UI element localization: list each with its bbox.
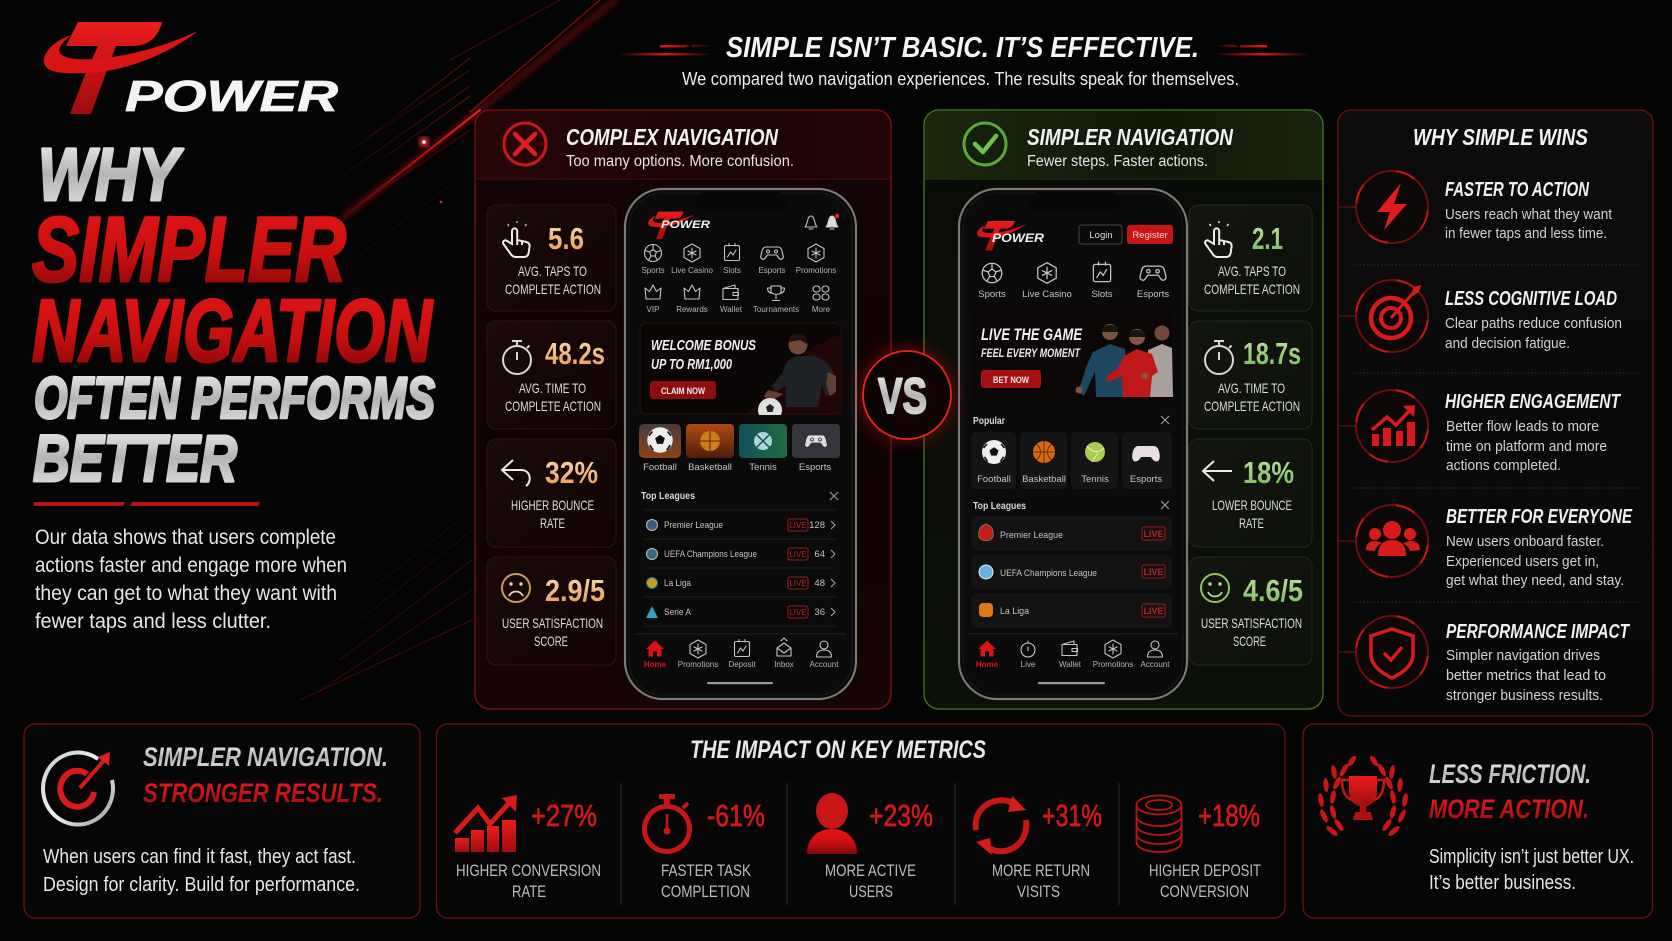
subheading: Fewer steps. Faster actions. [1027, 153, 1208, 170]
promo banner: UP TO RM1,000 [651, 357, 732, 373]
bottom nav: Account [810, 660, 839, 669]
sport tiles: Basketball [688, 462, 732, 473]
heading: LESS FRICTION. [1429, 759, 1591, 789]
player: red kit [1106, 329, 1158, 397]
category grid: Live Casino [671, 266, 713, 275]
app logo: POWER [992, 231, 1044, 245]
popular tiles [971, 415, 1172, 489]
promo banner: CLAIM NOW [661, 386, 705, 396]
stat card: time: 18.7s [1243, 336, 1301, 371]
reason: less cognitive load [1356, 280, 1622, 352]
metric: task completion: -61% [707, 798, 765, 833]
category row [978, 262, 1169, 300]
stat card: satisfaction: USER SATISFACTION [502, 615, 603, 631]
panel: stronger results [24, 724, 420, 918]
stat card: satisfaction: SCORE [1233, 633, 1266, 649]
heading accent: STRONGER RESULTS. [143, 778, 383, 808]
reason: higher engagement [1356, 390, 1621, 474]
league list: 64 [814, 549, 825, 560]
sport tiles [639, 424, 840, 473]
stat card: bounce: 32% [545, 455, 598, 490]
reason: better for everyone [1356, 505, 1632, 589]
bottom nav: Live [1021, 660, 1036, 669]
bottom nav [635, 634, 846, 684]
main title: BETTER [33, 421, 237, 495]
bottom nav: Home [976, 660, 999, 669]
reason: performance impact [1356, 616, 1630, 704]
intro paragraph: fewer taps and less clutter. [35, 610, 271, 633]
stat card: bounce: HIGHER BOUNCE [511, 497, 594, 513]
stat card: time: AVG. TIME TO [519, 380, 586, 396]
category grid: More [812, 305, 831, 314]
main title: SIMPLER [32, 199, 346, 301]
league list: LIVE [1143, 567, 1164, 577]
metric: task completion: COMPLETION [661, 882, 750, 901]
sport tiles: Football [643, 462, 677, 473]
category grid: Rewards [676, 305, 708, 314]
intro paragraph: Our data shows that users complete [35, 526, 336, 549]
stat card: satisfaction: USER SATISFACTION [1201, 615, 1302, 631]
stat card: taps [1189, 205, 1312, 311]
heading: simpler navigation: SIMPLER NAVIGATION [1027, 124, 1233, 150]
league list: LIVE [789, 608, 807, 617]
login button: Login [1089, 230, 1113, 241]
phone: complex app [625, 189, 856, 699]
promo banner: BET NOW [993, 375, 1029, 385]
league list: Serie A [664, 607, 692, 618]
metric: active users [807, 793, 933, 901]
body text [43, 846, 360, 896]
category row: Slots [1091, 289, 1113, 300]
stat card: time: AVG. TIME TO [1218, 380, 1285, 396]
stat card: time [487, 321, 616, 429]
popular tiles: Esports [1130, 474, 1162, 485]
stat card: taps: AVG. TAPS TO [518, 263, 587, 279]
panel: impact on key metrics [436, 724, 1285, 918]
league list: 48 [814, 578, 825, 589]
login button [1079, 225, 1122, 244]
bottom nav: Inbox [774, 660, 794, 669]
reason: less cognitive load: LESS COGNITIVE LOAD [1445, 288, 1617, 310]
reason: higher engagement: Better flow leads to more [1446, 419, 1599, 435]
player: white kit [1148, 326, 1173, 397]
popular tiles: Popular [973, 415, 1005, 427]
league list [641, 490, 838, 626]
stat card: satisfaction: SCORE [534, 633, 568, 649]
metric: conversion [455, 795, 601, 901]
heading: why simple wins: WHY SIMPLE WINS [1413, 124, 1589, 150]
intro paragraph [35, 526, 347, 633]
metric: active users: +23% [869, 798, 933, 833]
metric: return visits [976, 796, 1102, 901]
metric: active users: USERS [849, 882, 893, 901]
bottom nav: Deposit [728, 660, 756, 669]
metric: conversion: HIGHER CONVERSION [456, 861, 601, 880]
heading accent: MORE ACTION. [1429, 794, 1589, 824]
panel: why simple wins [1338, 110, 1653, 716]
reason: better for everyone: get what they need, and stay. [1446, 573, 1624, 589]
stat card: bounce: LOWER BOUNCE [1212, 497, 1292, 513]
section header [619, 32, 1310, 89]
logo: T Power: POWER [125, 72, 338, 121]
reason: less cognitive load: Clear paths reduce confusion [1445, 316, 1622, 332]
stat card: time [1189, 321, 1312, 429]
popular tiles: Basketball [1022, 474, 1066, 485]
notification icons [805, 214, 839, 229]
heading: THE IMPACT ON KEY METRICS [690, 736, 986, 764]
metric: deposit conversion: HIGHER DEPOSIT [1149, 861, 1261, 880]
league list [971, 500, 1172, 628]
bottom nav: Promotions [678, 660, 718, 669]
panel: complex navigation [475, 110, 891, 709]
stat card: taps: 2.1 [1252, 221, 1283, 256]
stat card: taps: 5.6 [548, 221, 584, 256]
metric: deposit conversion: +18% [1198, 798, 1260, 833]
stat card: time: 48.2s [545, 336, 605, 371]
metric: task completion: FASTER TASK [661, 861, 752, 880]
reason: better for everyone: New users onboard faster. [1446, 534, 1604, 550]
body text: Design for clarity. Build for performance. [43, 874, 360, 896]
bottom nav: Account [1141, 660, 1170, 669]
stat card: time: COMPLETE ACTION [1204, 398, 1300, 414]
stat card: bounce: RATE [1239, 515, 1264, 531]
reason: faster to action [1356, 171, 1612, 243]
category row: Sports [978, 289, 1006, 300]
league list: Top Leagues [641, 490, 695, 502]
reason: faster to action: in fewer taps and less time. [1445, 226, 1607, 242]
stat card: bounce [487, 439, 616, 547]
metric: task completion [644, 794, 765, 901]
league list: LIVE [1143, 529, 1164, 539]
metric: return visits: +31% [1042, 798, 1102, 833]
reason: faster to action: Users reach what they want [1445, 207, 1612, 223]
bottom nav: Promotions [1093, 660, 1133, 669]
background red light streaks [300, 0, 615, 700]
register button: Register [1132, 230, 1168, 241]
panel: less friction [1303, 724, 1652, 918]
category row: Esports [1137, 289, 1169, 300]
sport tiles: Esports [799, 462, 831, 473]
promo banner [972, 310, 1173, 402]
icon: green check [964, 123, 1006, 165]
stat card: taps: COMPLETE ACTION [1204, 281, 1300, 297]
main title: WHY [38, 133, 184, 216]
stat card: bounce: 18% [1243, 455, 1294, 490]
logo: T Power [44, 22, 338, 121]
intro paragraph: they can get to what they want with [35, 582, 337, 605]
category grid: Promotions [796, 266, 836, 275]
promo banner: FEEL EVERY MOMENT [981, 346, 1081, 360]
icon: red cross [504, 123, 546, 165]
icon: trophy with laurel [1317, 755, 1409, 837]
league list: 128 [809, 520, 825, 531]
stat card: satisfaction [1189, 557, 1312, 665]
icon: silver target with arrow [43, 752, 113, 825]
bottom nav: Wallet [1059, 660, 1082, 669]
category grid: Esports [758, 266, 786, 275]
stat card: taps: COMPLETE ACTION [505, 281, 601, 297]
league list: Top Leagues [973, 500, 1026, 512]
category grid: Slots [723, 266, 741, 275]
heading: complex navigation: COMPLEX NAVIGATION [566, 124, 778, 150]
reason: faster to action: FASTER TO ACTION [1445, 179, 1589, 201]
reason: higher engagement: actions completed. [1446, 458, 1561, 474]
metric: conversion: RATE [512, 882, 546, 901]
section header: We compared two navigation experiences. The results speak for themselves. [682, 69, 1239, 89]
bottom nav: Home [644, 660, 667, 669]
body text: When users can find it fast, they act fast. [43, 846, 356, 868]
reason: higher engagement: time on platform and more [1446, 439, 1607, 455]
league list: LIVE [789, 579, 807, 588]
subheading: Too many options. More confusion. [566, 153, 794, 170]
main title: NAVIGATION [32, 281, 434, 380]
panel: simpler navigation [924, 110, 1323, 709]
promo banner: LIVE THE GAME [981, 326, 1083, 344]
reason: better for everyone: Experienced users get in, [1446, 554, 1599, 570]
stat card: bounce: RATE [540, 515, 565, 531]
league list: LIVE [1143, 606, 1164, 616]
VS badge [857, 290, 957, 505]
league list: Premier League [1000, 530, 1063, 541]
intro paragraph: actions faster and engage more when [35, 554, 347, 577]
metric: deposit conversion [1136, 796, 1261, 901]
register button [1127, 225, 1173, 244]
metric: return visits: MORE RETURN [992, 861, 1090, 880]
main title: OFTEN PERFORMS [34, 366, 435, 431]
section header: SIMPLE ISN’T BASIC. IT’S EFFECTIVE. [726, 32, 1199, 64]
league list: LIVE [789, 521, 807, 530]
league list: UEFA Champions League [664, 549, 757, 560]
league list: La Liga [1000, 606, 1030, 617]
stat card: bounce [1189, 439, 1312, 547]
heading: SIMPLER NAVIGATION. [143, 742, 388, 772]
category grid [641, 244, 836, 314]
body text [1429, 846, 1634, 894]
promo banner [640, 323, 841, 424]
reason: performance impact: stronger business results. [1446, 688, 1603, 704]
app logo [648, 212, 710, 239]
main title [32, 133, 435, 495]
app logo: POWER [661, 219, 710, 231]
category row: Live Casino [1022, 289, 1072, 300]
metric: deposit conversion: CONVERSION [1160, 882, 1249, 901]
stat card: satisfaction: 4.6/5 [1243, 573, 1303, 608]
reason: performance impact: better metrics that lead to [1446, 668, 1606, 684]
VS badge: VS [878, 368, 927, 424]
popular tiles: Tennis [1081, 474, 1109, 485]
league list: Premier League [664, 520, 723, 531]
league list: LIVE [789, 550, 807, 559]
player: blue kit [1076, 324, 1128, 397]
category grid: VIP [647, 305, 659, 314]
sport tiles: Tennis [749, 462, 777, 473]
category grid: Wallet [720, 305, 743, 314]
body text: It’s better business. [1429, 872, 1576, 894]
metric: return visits: VISITS [1017, 882, 1060, 901]
reason: performance impact: Simpler navigation drives [1446, 648, 1600, 664]
league list: UEFA Champions League [1000, 568, 1097, 579]
bottom nav [968, 634, 1178, 684]
league list: 36 [814, 607, 825, 618]
app logo [977, 221, 1044, 250]
title divider [34, 502, 260, 506]
stat card: satisfaction [487, 557, 616, 665]
category grid: Sports [641, 266, 665, 275]
stat card: time: COMPLETE ACTION [505, 398, 601, 414]
promo banner: WELCOME BONUS [651, 338, 756, 354]
reason: less cognitive load: and decision fatigue. [1445, 336, 1570, 352]
phone: simpler app [959, 189, 1187, 699]
category grid: Tournaments [753, 305, 799, 314]
metric: conversion: +27% [531, 798, 597, 833]
reason: higher engagement: HIGHER ENGAGEMENT [1445, 391, 1621, 413]
popular tiles: Football [977, 474, 1011, 485]
stat card: taps: AVG. TAPS TO [1218, 263, 1286, 279]
stat card: satisfaction: 2.9/5 [545, 573, 605, 608]
stat card: taps [487, 205, 616, 311]
metric: active users: MORE ACTIVE [825, 861, 916, 880]
league list: La Liga [664, 578, 692, 589]
